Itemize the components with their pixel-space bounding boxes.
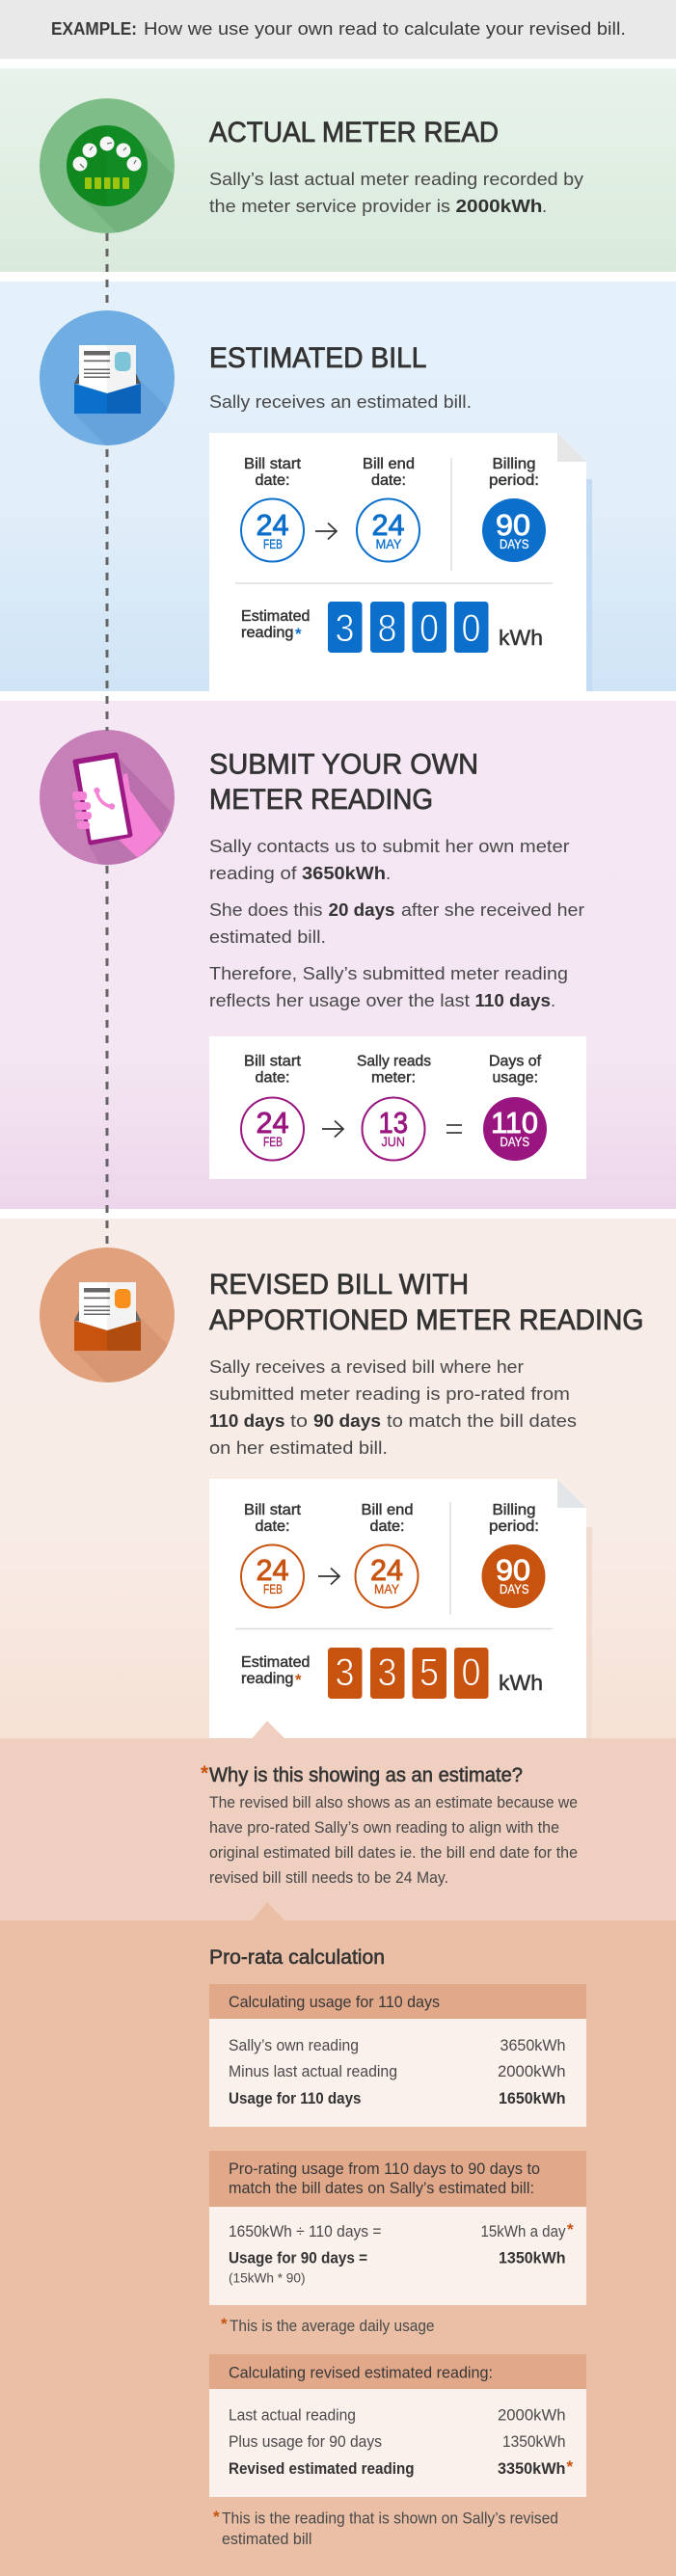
bill start date: Bill start bbox=[244, 1502, 302, 1518]
estimated reading digits: 0 bbox=[461, 607, 480, 650]
body text: 20 days bbox=[328, 899, 395, 920]
bill start date: FEB bbox=[263, 1135, 283, 1149]
heading bbox=[209, 1269, 644, 1336]
bill end date bbox=[355, 1502, 419, 1608]
body text: reading of bbox=[209, 863, 297, 883]
panel: estimated bill bbox=[0, 282, 676, 691]
table: calculating usage for 110 days: Usage for 110 days bbox=[229, 2090, 361, 2107]
bill start date bbox=[241, 1053, 304, 1161]
table: calculating usage for 110 days: 3650kWh bbox=[500, 2037, 565, 2054]
panel: submit your own meter reading bbox=[0, 701, 676, 1209]
heading: APPORTIONED METER READING bbox=[209, 1304, 644, 1336]
revised bill card bbox=[209, 1479, 592, 1738]
table: calculating revised estimated reading: Last actual reading bbox=[229, 2406, 356, 2424]
table: calculating usage for 110 days: Minus last actual reading bbox=[229, 2063, 397, 2080]
billing period: period: bbox=[489, 1518, 539, 1535]
table: calculating revised estimated reading: Plus usage for 90 days bbox=[229, 2433, 382, 2451]
panel: pro-rata calculation bbox=[0, 1902, 676, 2576]
table: pro-rating usage: 1350kWh bbox=[499, 2250, 565, 2267]
bill end date: MAY bbox=[374, 1582, 399, 1597]
estimated reading label: Estimated bbox=[241, 1654, 311, 1671]
table: pro-rating usage: Usage for 90 days = bbox=[229, 2250, 367, 2267]
body text: reflects her usage over the last bbox=[209, 990, 470, 1010]
heading: REVISED BILL WITH bbox=[209, 1269, 469, 1301]
days of usage: DAYS bbox=[500, 1135, 529, 1149]
body text bbox=[209, 836, 584, 1010]
question heading: * bbox=[201, 1762, 209, 1784]
heading: METER READING bbox=[209, 784, 433, 816]
billing period: Billing bbox=[492, 1502, 536, 1518]
billing period: Billing bbox=[492, 456, 536, 472]
body text: the meter service provider is bbox=[209, 196, 450, 216]
table: pro-rating usage: (15kWh * 90) bbox=[229, 2269, 305, 2285]
bill end date: date: bbox=[371, 472, 406, 489]
bill start date: Bill start bbox=[244, 456, 302, 472]
bill end date: MAY bbox=[376, 537, 401, 551]
days of usage bbox=[483, 1053, 547, 1161]
billing period: 90 bbox=[496, 508, 530, 542]
body text: 2000kWh bbox=[455, 196, 542, 216]
body text: submitted meter reading is pro-rated from bbox=[209, 1383, 570, 1404]
estimated reading label: Estimated bbox=[241, 608, 311, 625]
explanation text: The revised bill also shows as an estimate because we bbox=[209, 1794, 578, 1811]
estimated reading label: reading bbox=[241, 1671, 293, 1687]
table: pro-rating usage: 1650kWh ÷ 110 days = bbox=[229, 2223, 382, 2241]
estimated reading digits: 5 bbox=[419, 1651, 439, 1694]
days of usage: 110 bbox=[491, 1106, 538, 1140]
table: calculating revised estimated reading bbox=[209, 2354, 586, 2497]
explanation text: revised bill still needs to be 24 May. bbox=[209, 1869, 448, 1887]
sally reads meter: Sally reads bbox=[357, 1053, 431, 1070]
estimated reading label bbox=[241, 1654, 311, 1689]
estimated reading label: reading bbox=[241, 625, 293, 641]
bill card bbox=[209, 433, 592, 691]
heading: ESTIMATED BILL bbox=[209, 342, 426, 374]
heading bbox=[209, 748, 478, 816]
body text: to match the bill dates bbox=[387, 1410, 577, 1431]
arrow bbox=[318, 1568, 339, 1585]
estimated reading digits: 0 bbox=[419, 607, 439, 650]
footnote: reading shown on revised bill: This is the reading that is shown on Sally’s revised bbox=[222, 2510, 558, 2528]
equals sign bbox=[446, 1125, 462, 1133]
body text: to bbox=[290, 1410, 308, 1431]
estimated reading label bbox=[241, 608, 311, 643]
body text: 110 days bbox=[474, 990, 551, 1010]
billing period: DAYS bbox=[500, 1582, 528, 1597]
body text bbox=[209, 1356, 577, 1458]
sally reads meter: JUN bbox=[382, 1135, 405, 1149]
table: calculating revised estimated reading: Revised estimated reading bbox=[229, 2460, 415, 2478]
panel: example header bbox=[0, 0, 676, 59]
icon: envelope with bill bbox=[40, 310, 175, 445]
heading: ACTUAL METER READ bbox=[209, 117, 499, 148]
billing period bbox=[482, 1502, 546, 1608]
sally reads meter bbox=[357, 1053, 431, 1161]
panel: why is this showing as an estimate bbox=[0, 1721, 676, 1920]
days of usage: Days of bbox=[489, 1053, 542, 1070]
bill start date: Bill start bbox=[244, 1053, 302, 1070]
table: pro-rating usage: match the bill dates on Sally’s estimated bill: bbox=[229, 2179, 534, 2197]
body text: after she received her bbox=[401, 899, 584, 920]
sally reads meter: meter: bbox=[371, 1070, 416, 1086]
estimated reading digits: 0 bbox=[461, 1651, 480, 1694]
bill start date bbox=[241, 456, 304, 561]
sally reads meter: 13 bbox=[378, 1106, 408, 1140]
bill start date: date: bbox=[255, 472, 289, 489]
bill end date: Bill end bbox=[361, 1502, 413, 1518]
body text: Sally’s last actual meter reading recorded by bbox=[209, 169, 584, 189]
footnote: reading shown on revised bill: * bbox=[213, 2508, 220, 2526]
footnote: average daily usage: This is the average daily usage bbox=[230, 2318, 434, 2335]
bill end date bbox=[357, 456, 419, 561]
bill start date: date: bbox=[255, 1518, 289, 1535]
body text: Therefore, Sally’s submitted meter reading bbox=[209, 963, 568, 983]
body text: 90 days bbox=[313, 1410, 381, 1431]
table: calculating revised estimated reading: 1350kWh bbox=[502, 2433, 565, 2451]
bill start date: 24 bbox=[257, 1106, 289, 1140]
estimated reading digits: 3 bbox=[336, 1651, 355, 1694]
unit: kWh bbox=[499, 1671, 543, 1695]
explanation text bbox=[209, 1794, 578, 1887]
billing period: 90 bbox=[496, 1553, 530, 1587]
bill end date: 24 bbox=[372, 508, 405, 542]
footnote: reading shown on revised bill: estimated bill bbox=[222, 2531, 312, 2548]
bill start date bbox=[241, 1502, 304, 1608]
icon: hand holding phone bbox=[40, 730, 175, 868]
bill start date: 24 bbox=[257, 508, 289, 542]
table: calculating revised estimated reading: 2000kWh bbox=[498, 2406, 565, 2424]
question heading: Why is this showing as an estimate? bbox=[209, 1764, 523, 1786]
panel: revised bill with apportioned meter reading bbox=[0, 1219, 676, 1738]
dashed timeline connector bbox=[106, 233, 108, 1248]
bill start date: FEB bbox=[263, 537, 283, 551]
bill end date: Bill end bbox=[363, 456, 415, 472]
table: pro-rating usage: Pro-rating usage from 110 days to 90 days to bbox=[229, 2160, 540, 2178]
section heading: Pro-rata calculation bbox=[209, 1946, 385, 1969]
days of usage card bbox=[209, 1036, 586, 1179]
explanation text: have pro-rated Sally’s own reading to align with the bbox=[209, 1819, 559, 1837]
table: calculating usage for 110 days: Calculating usage for 110 days bbox=[229, 1993, 440, 2011]
icon: electricity meter bbox=[40, 98, 175, 233]
body text: Sally receives an estimated bill. bbox=[209, 391, 472, 412]
billing period bbox=[482, 456, 546, 562]
unit: kWh bbox=[499, 626, 543, 650]
body text: 3650kWh bbox=[302, 863, 386, 883]
table: calculating revised estimated reading: 3350kWh bbox=[498, 2460, 565, 2478]
arrow bbox=[315, 523, 337, 540]
table: calculating usage for 110 days bbox=[209, 1984, 586, 2127]
body text: estimated bill. bbox=[209, 926, 326, 947]
body text: . bbox=[542, 196, 547, 216]
body text: . bbox=[386, 863, 391, 883]
explanation text: original estimated bill dates ie. the bill end date for the bbox=[209, 1844, 578, 1862]
estimated reading digits: 3 bbox=[336, 607, 355, 650]
bill start date: FEB bbox=[263, 1582, 283, 1597]
body text: . bbox=[551, 990, 555, 1010]
table: calculating usage for 110 days: 1650kWh bbox=[499, 2090, 565, 2107]
table: pro-rating usage bbox=[209, 2151, 586, 2305]
icon: envelope with revised bill bbox=[40, 1248, 175, 1382]
panel: actual meter read bbox=[0, 68, 676, 291]
footnote: reading shown on revised bill bbox=[213, 2508, 558, 2548]
estimated reading digits: 8 bbox=[378, 607, 397, 650]
table: pro-rating usage: * bbox=[567, 2220, 574, 2239]
estimated reading digits: 3 bbox=[378, 1651, 397, 1694]
body text: Sally contacts us to submit her own meter bbox=[209, 836, 569, 856]
estimated reading label: * bbox=[295, 625, 302, 643]
billing period: period: bbox=[489, 472, 539, 489]
table: calculating usage for 110 days: 2000kWh bbox=[498, 2063, 565, 2080]
bill start date: date: bbox=[255, 1070, 289, 1086]
estimated reading label: * bbox=[295, 1671, 302, 1689]
body text: She does this bbox=[209, 899, 322, 920]
estimated reading digits bbox=[328, 1648, 488, 1699]
bill end date: 24 bbox=[370, 1553, 403, 1587]
arrow bbox=[322, 1120, 343, 1138]
body text: Sally receives a revised bill where her bbox=[209, 1356, 524, 1377]
body text: 110 days bbox=[209, 1410, 285, 1431]
header text bold lead: EXAMPLE: bbox=[51, 19, 137, 39]
billing period: DAYS bbox=[500, 537, 528, 551]
estimated reading digits bbox=[328, 602, 488, 653]
header text: How we use your own read to calculate your revised bill. bbox=[144, 19, 626, 39]
heading: SUBMIT YOUR OWN bbox=[209, 748, 478, 781]
footnote: average daily usage: * bbox=[221, 2315, 228, 2333]
table: calculating revised estimated reading: * bbox=[567, 2457, 573, 2476]
bill start date: 24 bbox=[257, 1553, 289, 1587]
table: calculating usage for 110 days: Sally’s own reading bbox=[229, 2037, 359, 2054]
table: calculating revised estimated reading: Calculating revised estimated reading: bbox=[229, 2364, 493, 2381]
body text: on her estimated bill. bbox=[209, 1437, 388, 1458]
bill end date: date: bbox=[370, 1518, 405, 1535]
table: pro-rating usage: 15kWh a day bbox=[480, 2223, 566, 2241]
body text bbox=[209, 169, 584, 216]
days of usage: usage: bbox=[492, 1070, 538, 1086]
